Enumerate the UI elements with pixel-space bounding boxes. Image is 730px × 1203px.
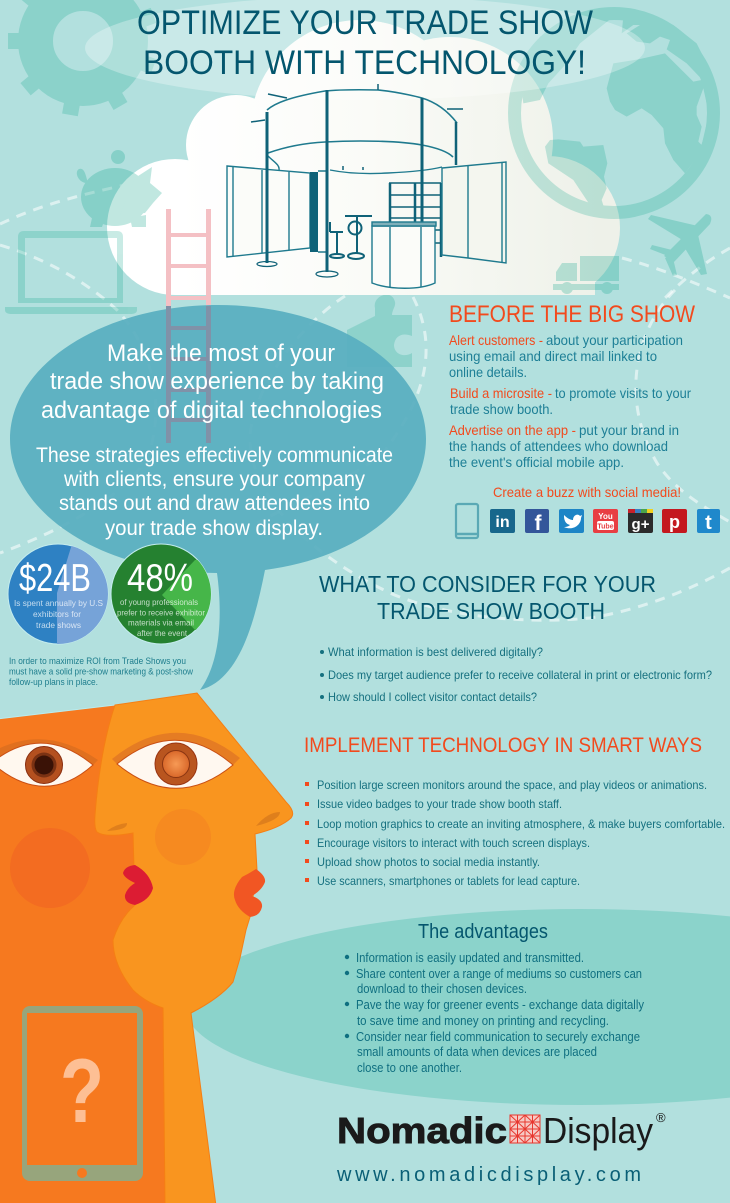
icon: linkedin: in — [495, 514, 510, 531]
bubble body text: These strategies effectively communicate — [36, 444, 393, 467]
implement bullet list: Issue video badges to your trade show booth staff. — [317, 797, 562, 811]
before the show text — [449, 332, 691, 470]
ROI note: follow-up plans in place. — [9, 677, 98, 688]
booth left wall — [227, 166, 327, 257]
icon: tablet with question mark: ? — [60, 1041, 104, 1142]
front face eye — [117, 740, 233, 788]
stat circle: 48%: 48% — [127, 557, 193, 600]
advantages bullet list: Information is easily updated and transmitted. — [356, 950, 584, 965]
advantages bullet list: Pave the way for greener events - exchange data digitally — [356, 997, 644, 1012]
stat circle: $24B: trade shows — [36, 620, 81, 630]
booth poles — [251, 84, 463, 277]
icon: facebook — [525, 509, 549, 535]
implement bullet list: Upload show photos to social media instantly. — [317, 855, 540, 869]
heading: what to consider — [319, 571, 656, 624]
implement bullet list: Encourage visitors to interact with touch screen displays. — [317, 836, 590, 850]
implement bullet list: Use scanners, smartphones or tablets for lead capture. — [317, 874, 580, 888]
consider bullet list: How should I collect visitor contact details? — [328, 690, 537, 704]
icon: piggy bank — [77, 150, 162, 227]
pale sweep across title — [85, 0, 645, 100]
cloud behind booth — [107, 20, 620, 300]
back face lips — [123, 865, 153, 905]
before the show text: online details. — [449, 364, 527, 380]
before the show text: Alert customers - — [449, 332, 543, 348]
before the show text: the hands of attendees who download — [449, 438, 668, 454]
before the show text: Build a microsite - — [450, 385, 552, 401]
logo lattice mark — [510, 1115, 540, 1143]
stat circle: 48%: of young professionals — [120, 597, 198, 607]
icon: tablet with question mark — [22, 1006, 143, 1181]
stat circle: $24B: exhibitors for — [33, 609, 81, 619]
stat circle: 48% — [111, 544, 215, 644]
booth illustration — [227, 84, 506, 288]
booth counter — [372, 222, 436, 288]
icon: facebook: f — [534, 512, 542, 535]
logo: Nomadic Display: Display — [543, 1110, 653, 1151]
bubble headline — [41, 340, 384, 424]
icon: laptop — [5, 231, 137, 314]
icon: youtube: You — [598, 512, 613, 521]
front face lips — [234, 869, 265, 917]
front face brow — [112, 733, 240, 765]
before the show text: the event's official mobile app. — [449, 454, 624, 470]
icon: google plus: g+ — [632, 516, 650, 533]
icon: airplane — [648, 214, 711, 276]
icon: twitter — [559, 509, 584, 533]
logo: Nomadic Display — [337, 1110, 666, 1151]
booth overhead ring — [267, 90, 457, 174]
advantages bullet list: download to their chosen devices. — [357, 981, 527, 996]
heading: what to consider: WHAT TO CONSIDER FOR YOUR — [319, 571, 656, 597]
stat circle: $24B: $24B — [19, 557, 91, 600]
advantages bullet list — [345, 950, 644, 1075]
ROI note: must have a solid pre-show marketing & post-show — [9, 666, 193, 678]
before the show text: trade show booth. — [450, 401, 553, 417]
icon: pinterest: p — [669, 512, 680, 532]
icon: tumblr style: t — [705, 512, 712, 534]
icon: youtube: Tube — [597, 524, 614, 530]
heading: before the big show: BEFORE THE BIG SHOW — [449, 301, 695, 328]
speech bubble — [10, 305, 426, 690]
advantages bullet list: small amounts of data when devices are placed — [357, 1044, 597, 1059]
consider bullet list — [320, 645, 712, 704]
social media callout: Create a buzz with social media! — [493, 484, 681, 500]
advantages bullet list: Share content over a range of mediums so customers can — [356, 966, 642, 981]
icon: tablet outline — [456, 504, 478, 538]
logo: Nomadic Display: ® — [656, 1110, 666, 1125]
consider bullet list: What information is best delivered digitally? — [328, 645, 543, 659]
icon: gear — [8, 0, 156, 116]
advantages bullet list: Consider near field communication to securely exchange — [356, 1029, 640, 1044]
ROI note — [9, 656, 193, 688]
puzzle piece icon — [347, 295, 412, 367]
ladder upper part — [166, 209, 211, 309]
ROI note: In order to maximize ROI from Trade Shows you — [9, 656, 186, 667]
before the show text: Advertise on the app - — [449, 422, 576, 438]
nostrils — [107, 812, 280, 831]
dashed route lines — [0, 185, 730, 620]
icon: globe — [514, 14, 714, 212]
bubble body text: your trade show display. — [105, 517, 323, 540]
back face brow — [0, 739, 98, 765]
booth table and stools — [330, 216, 372, 259]
front face — [95, 693, 293, 1203]
bubble headline: Make the most of your — [107, 340, 335, 367]
stat circle: $24B: Is spent annually by U.S — [14, 598, 103, 608]
back face eye — [0, 743, 93, 786]
heading: the advantages: The advantages — [418, 921, 548, 943]
bubble body text: stands out and draw attendees into — [59, 492, 370, 515]
heading: what to consider: TRADE SHOW BOOTH — [377, 598, 605, 624]
back face — [0, 705, 175, 1203]
stat circle: 48%: after the event — [137, 628, 188, 638]
title — [137, 4, 593, 82]
before the show text: put your brand in — [579, 422, 679, 438]
bubble body text — [36, 444, 393, 540]
website url: www.nomadicdisplay.com — [336, 1164, 641, 1186]
title: OPTIMIZE YOUR TRADE SHOW — [137, 4, 593, 42]
before the show text: to promote visits to your — [555, 385, 691, 401]
stat circle: 48%: materials via email — [128, 618, 194, 628]
booth back shelves — [389, 183, 441, 257]
stat circle: 48%: prefer to receive exhibitor — [117, 608, 205, 618]
ladder lower part seen through bubble — [166, 306, 211, 443]
panel: advantages ellipse — [185, 909, 730, 1105]
before the show text: using email and direct mail linked to — [449, 348, 657, 364]
advantages bullet list: close to one another. — [357, 1060, 462, 1075]
icon: linkedin — [490, 509, 515, 533]
bubble body text: with clients, ensure your company — [63, 468, 365, 491]
stat circle: $24B — [8, 544, 110, 645]
title: BOOTH WITH TECHNOLOGY! — [143, 44, 586, 82]
logo: Nomadic Display: Nomadic — [337, 1110, 507, 1151]
icon: pinterest — [662, 509, 687, 533]
icon: truck — [553, 256, 619, 294]
icon: youtube — [593, 509, 618, 533]
icon: tumblr style — [697, 509, 720, 534]
icon: google plus — [628, 509, 653, 533]
social icons row — [490, 509, 720, 535]
implement bullet list — [305, 778, 725, 888]
bubble headline: advantage of digital technologies — [41, 397, 382, 424]
booth right wall — [442, 162, 506, 263]
bubble headline: trade show experience by taking — [50, 368, 384, 395]
back face cheek — [10, 828, 90, 908]
front face cheek — [155, 809, 211, 865]
before the show text: about your participation — [546, 332, 683, 348]
advantages bullet list: to save time and money on printing and recycling. — [357, 1013, 609, 1028]
